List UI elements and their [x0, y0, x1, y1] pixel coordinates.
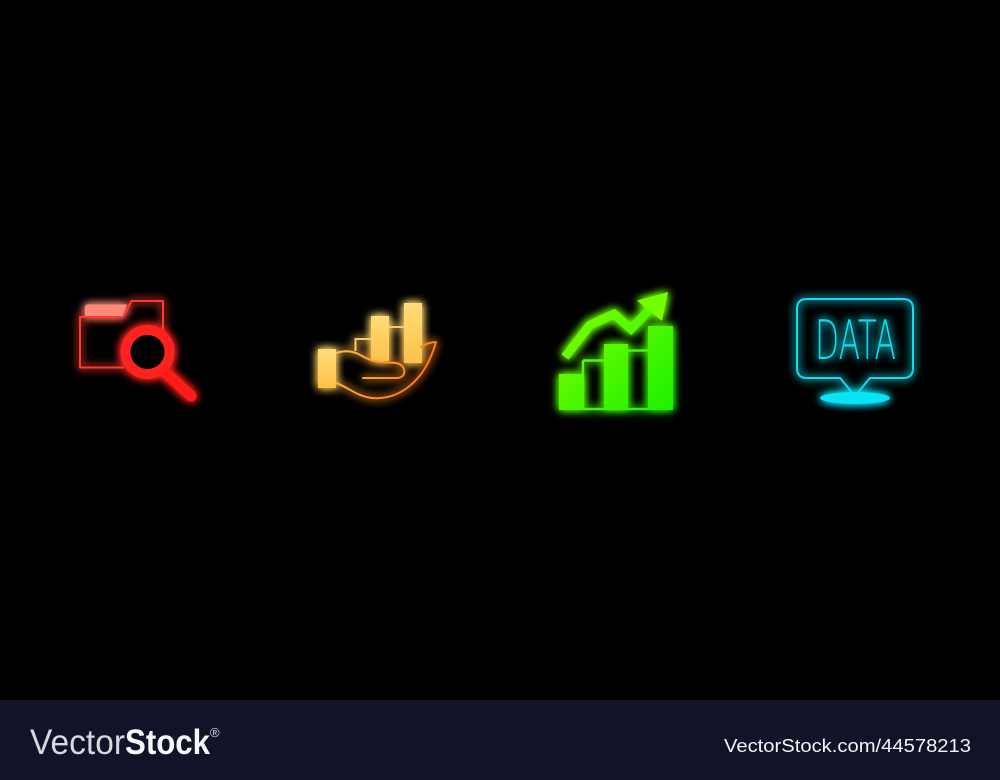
cuff	[318, 349, 336, 388]
trend arrow line	[565, 306, 653, 357]
registered mark: ®	[210, 725, 220, 740]
folder outline	[80, 301, 163, 368]
base ellipse	[820, 392, 890, 404]
icon: red folder with magnifying glass	[80, 301, 191, 396]
watermark footer bar	[0, 700, 1000, 780]
icon: cyan DATA speech bubble	[797, 299, 913, 404]
image ID: VectorStock.com/44578213	[724, 736, 971, 756]
DATA label: DATA	[815, 309, 896, 372]
icon: hand holding bar chart	[318, 303, 436, 398]
bars	[371, 303, 422, 363]
magnifier handle	[166, 373, 191, 396]
VectorStock logo: Stock	[125, 723, 210, 762]
chart connector lines	[356, 327, 404, 351]
bubble outline	[797, 299, 913, 396]
solid bars	[559, 326, 673, 410]
hand outline	[336, 342, 436, 398]
icon: green growth chart with arrow	[559, 292, 673, 410]
VectorStock logo: Vector	[30, 723, 125, 762]
arrow head	[637, 292, 668, 321]
folder tab	[85, 304, 127, 316]
outlined bars	[583, 350, 648, 409]
magnifier lens	[126, 330, 170, 374]
VectorStock logo	[30, 723, 210, 762]
